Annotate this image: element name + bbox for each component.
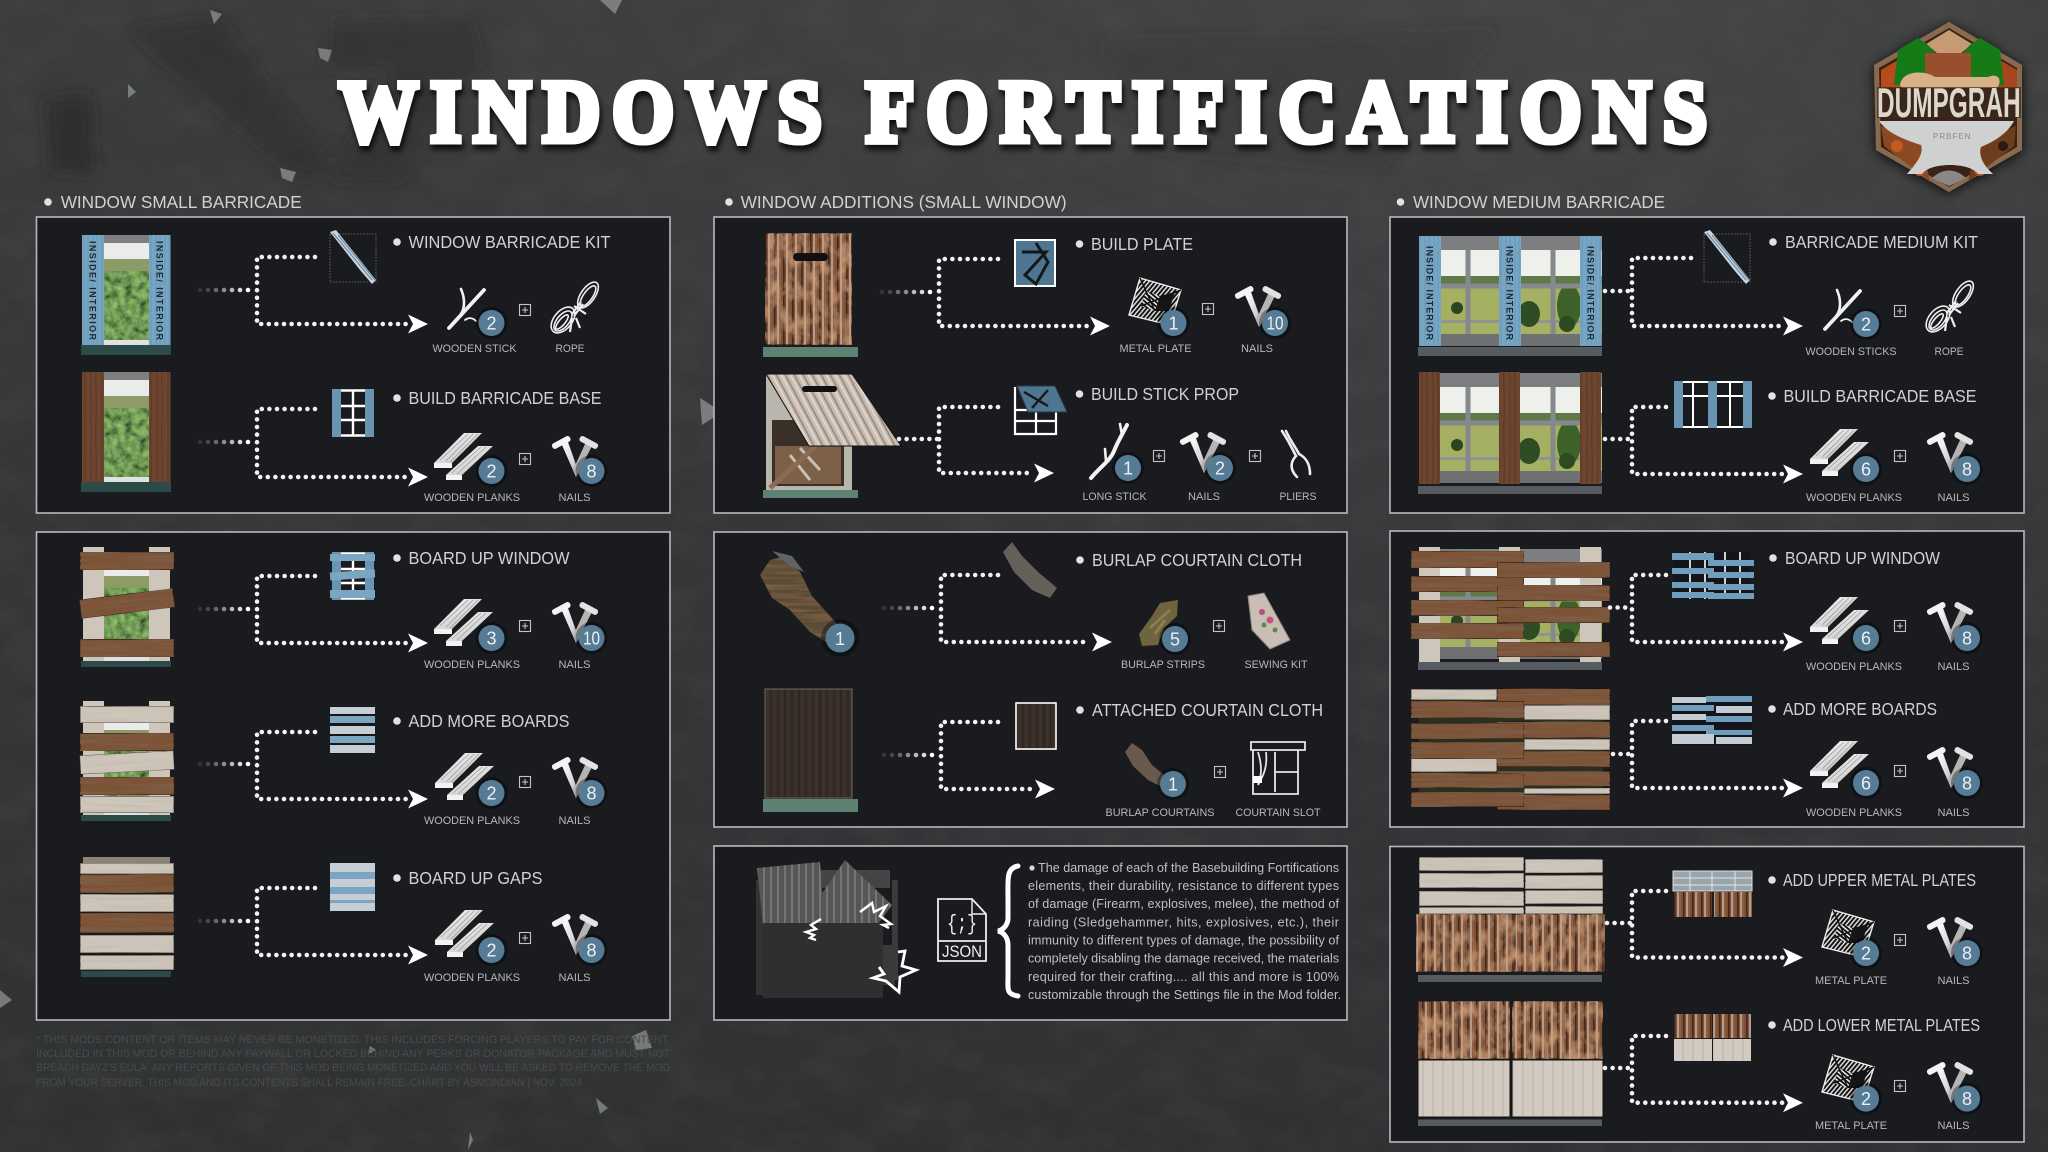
- ingredient: burlap strips: 5: [1170, 630, 1180, 650]
- icon: kit: [1704, 230, 1750, 284]
- heading: BUILD BARRICADE BASE: [408, 388, 602, 408]
- ingredient: nails: NAILS: [1938, 807, 1970, 819]
- ingredient: metal plate: 2: [1861, 944, 1871, 964]
- ingredient: wooden stick: WOODEN STICK: [432, 343, 517, 355]
- heading: ATTACHED COURTAIN CLOTH: [1092, 700, 1323, 720]
- ingredient: sewing kit: [1244, 593, 1308, 671]
- ingredient: planks: WOODEN PLANKS: [1806, 492, 1902, 504]
- icon: boards 1: [330, 552, 375, 600]
- panel: burlap curtains: [714, 532, 1347, 827]
- ingredient: nails: [551, 601, 608, 671]
- ingredient: planks: [1806, 429, 1902, 504]
- window: more boards: [80, 701, 174, 821]
- ingredient: planks: 3: [486, 628, 497, 648]
- ingredient: nails: NAILS: [1938, 1120, 1970, 1132]
- window: inside view: INSIDE/ INTERIOR: [88, 241, 98, 341]
- ingredient: metal plate: 1: [1168, 314, 1179, 334]
- ingredient: rope: ROPE: [1934, 346, 1964, 358]
- heading: BOARD UP WINDOW: [1785, 548, 1940, 568]
- panel: medium barricade boards: [1390, 531, 2024, 827]
- connector: [198, 732, 428, 808]
- plus: [1154, 450, 1164, 462]
- ingredient: planks: [424, 599, 520, 671]
- ingredient: rope: [546, 279, 602, 355]
- ingredient: metal plate: [1120, 278, 1192, 355]
- ingredient: planks: 2: [486, 784, 497, 804]
- icon: boards 2: [330, 706, 375, 754]
- ingredient: planks: 6: [1861, 774, 1871, 794]
- plus: [1894, 620, 1906, 632]
- icon: upper plates mini: [1673, 871, 1752, 917]
- plus: [1894, 934, 1906, 946]
- ingredient: nails: [1926, 431, 1983, 504]
- window: inside view: INSIDE/ INTERIOR: [1424, 246, 1434, 341]
- heading: BUILD PLATE: [1091, 234, 1193, 254]
- window: attached curtain: [763, 689, 858, 812]
- section heading: window small barricade: WINDOW SMALL BARRICADE: [61, 192, 302, 212]
- window: inside view: [81, 235, 171, 355]
- ingredient: planks: WOODEN PLANKS: [424, 972, 520, 984]
- plus: [520, 304, 530, 316]
- ingredient: planks: [1806, 741, 1902, 819]
- heading: BARRICADE MEDIUM KIT: [1785, 232, 1978, 252]
- connector: [198, 888, 428, 964]
- window: upper plates: [1416, 857, 1605, 982]
- window: stick prop: [763, 374, 901, 498]
- ingredient: metal plate: METAL PLATE: [1815, 975, 1887, 987]
- ingredient: nails: NAILS: [1938, 661, 1970, 673]
- ingredient: metal plate: [1815, 1055, 1887, 1132]
- ingredient: nails: NAILS: [558, 972, 590, 984]
- window: board up: [79, 547, 175, 667]
- ingredient: burlap curtains: BURLAP COURTAINS: [1106, 807, 1214, 819]
- plus: [520, 932, 530, 944]
- icon: burlap mini: [1003, 542, 1057, 598]
- connector: [1613, 721, 1803, 798]
- ingredient: planks: WOODEN PLANKS: [424, 815, 520, 827]
- ingredient: metal plate: METAL PLATE: [1815, 1120, 1887, 1132]
- heading: ADD LOWER METAL PLATES: [1783, 1015, 1980, 1035]
- text block: customizable through the Settings file in the Mod folder.: [1028, 988, 1341, 1002]
- connector: [198, 576, 428, 652]
- ingredient: planks: 2: [486, 462, 497, 482]
- ingredient: wooden sticks: 2: [1861, 314, 1871, 334]
- ingredient: nails: 8: [1962, 774, 1972, 794]
- icon: prop mini: [1015, 386, 1067, 434]
- ingredient: burlap strips: BURLAP STRIPS: [1121, 659, 1205, 671]
- icon: json file: [938, 899, 986, 961]
- connector: [198, 409, 428, 486]
- window: inside view: [1418, 236, 1602, 356]
- ingredient: nails: [1926, 916, 1983, 987]
- heading: BURLAP COURTAIN CLOTH: [1092, 550, 1302, 570]
- text block: required for their crafting.... all this and more is 100%: [1028, 970, 1339, 984]
- window: base: [1418, 372, 1602, 494]
- icon: curtain slot: COURTAIN SLOT: [1236, 807, 1321, 819]
- brace: [998, 866, 1018, 996]
- ingredient: metal plate: 2: [1861, 1089, 1871, 1109]
- item: burlap cloth: 1: [835, 629, 845, 649]
- illustration: damaged plates: [756, 860, 916, 998]
- plus: [520, 620, 530, 632]
- ingredient: long stick: LONG STICK: [1082, 491, 1147, 503]
- window: inside view: INSIDE/ INTERIOR: [1504, 246, 1514, 341]
- plus: [1202, 304, 1214, 314]
- ingredient: nails: NAILS: [1938, 975, 1970, 987]
- panel: small barricade boards: [36, 532, 670, 1020]
- window: gaps boarded: [80, 857, 174, 977]
- heading: WINDOW BARRICADE KIT: [408, 232, 611, 252]
- ingredient: long stick: [1082, 424, 1147, 503]
- heading: ADD MORE BOARDS: [1783, 699, 1937, 719]
- connector: [880, 259, 1110, 336]
- window: inside view: INSIDE/ INTERIOR: [1586, 246, 1596, 341]
- plus: [520, 454, 530, 464]
- text block: [1028, 861, 1341, 1002]
- plus: [1214, 620, 1224, 632]
- title: WINDOWS FORTIFICATIONS: [339, 63, 1707, 161]
- icon: json file: {;}: [947, 912, 977, 937]
- window: more boards: [1411, 688, 1610, 810]
- heading: ADD UPPER METAL PLATES: [1783, 870, 1976, 890]
- ingredient: planks: [424, 910, 520, 984]
- footer disclaimer: BREACH DAYZ'S EULA. ANY REPORTS GIVEN OF THIS MOD BEING MONETIZED AND YOU WILL BE ASKED TO REMOVE THE MOD: [36, 1062, 670, 1074]
- icon: boards 3: [330, 863, 375, 911]
- ingredient: nails: 8: [1962, 628, 1972, 648]
- ingredient: rope: ROPE: [556, 343, 584, 355]
- icon: curtain mini: [1016, 703, 1056, 749]
- footer disclaimer: FROM YOUR SERVER. THIS MOD AND ITS CONTENTS SHALL REMAIN FREE. CHART BY ASMONDIAN | NOV. 2024: [36, 1077, 582, 1089]
- ingredient: planks: 2: [486, 940, 497, 960]
- ingredient: metal plate: [1815, 910, 1887, 987]
- ingredient: nails: 8: [586, 462, 597, 482]
- ingredient: nails: NAILS: [558, 492, 590, 504]
- ingredient: sewing kit: SEWING KIT: [1244, 659, 1308, 671]
- ingredient: nails: NAILS: [558, 815, 590, 827]
- heading: BOARD UP WINDOW: [408, 548, 570, 568]
- ingredient: pliers: [1280, 431, 1316, 503]
- text block: completely disabling the damage received, the materials: [1028, 952, 1339, 966]
- ingredient: planks: [424, 753, 520, 827]
- plus: [1250, 450, 1260, 462]
- heading: BUILD STICK PROP: [1091, 384, 1239, 404]
- window: base: [81, 372, 171, 492]
- ingredient: nails: 8: [1962, 944, 1972, 964]
- text block: of damage (Firearm, explosives, melee), the method of: [1028, 897, 1340, 911]
- ingredient: planks: WOODEN PLANKS: [424, 659, 520, 671]
- text block: elements, their durability, resistance to different types: [1028, 879, 1339, 893]
- window: lower plates: [1418, 1001, 1603, 1126]
- icon: kit: [330, 230, 376, 284]
- ingredient: nails: [551, 756, 608, 827]
- plus: [1214, 766, 1226, 778]
- connector: [882, 722, 1055, 798]
- heading: ADD MORE BOARDS: [408, 711, 570, 731]
- ingredient: burlap strips: [1121, 600, 1205, 671]
- ingredient: nails: 10: [1266, 314, 1284, 334]
- ingredient: nails: NAILS: [558, 659, 590, 671]
- plus: [520, 776, 530, 788]
- ingredient: planks: WOODEN PLANKS: [1806, 807, 1902, 819]
- ingredient: metal plate: METAL PLATE: [1120, 343, 1192, 355]
- ingredient: planks: WOODEN PLANKS: [1806, 661, 1902, 673]
- ingredient: nails: 2: [1215, 458, 1225, 478]
- text block: immunity to different types of damage, the possibility of: [1028, 934, 1340, 948]
- connector: [1610, 575, 1803, 652]
- connector: [1605, 407, 1803, 484]
- icon: base frame: [332, 389, 374, 437]
- icon: lower plates mini: [1674, 1014, 1751, 1061]
- ingredient: planks: [424, 433, 520, 504]
- ingredient: nails: [551, 913, 608, 984]
- ingredient: nails: 8: [586, 940, 597, 960]
- connector: [1607, 891, 1803, 967]
- text block: raiding (Sledgehammer, hits, explosives, etc.), their: [1028, 916, 1339, 930]
- ingredient: nails: [1926, 746, 1983, 819]
- connector: [198, 257, 428, 334]
- ingredient: planks: WOODEN PLANKS: [424, 492, 520, 504]
- logo badge: PRBFEN: [1933, 132, 1971, 141]
- connector: [882, 575, 1112, 652]
- footer disclaimer: * THIS MODS CONTENT OR ITEMS MAY NEVER BE MONETIZED. THIS INCLUDES FORCING PLAYERS TO PAY FOR CONTENT,: [36, 1034, 670, 1046]
- ingredient: nails: [1179, 431, 1236, 503]
- plus: [1894, 306, 1906, 316]
- window: board up: [1411, 547, 1610, 670]
- ingredient: planks: 6: [1861, 460, 1871, 480]
- ingredient: wooden sticks: WOODEN STICKS: [1806, 346, 1896, 358]
- plus: [1894, 766, 1906, 776]
- panel: small barricade kit and base: [36, 217, 670, 513]
- icon: curtain slot: [1236, 742, 1321, 819]
- ingredient: wooden sticks: [1806, 290, 1896, 358]
- text block: The damage of each of the Basebuilding Fortifications: [1038, 861, 1339, 875]
- logo badge: [1874, 22, 2022, 192]
- ingredient: wooden stick: [432, 289, 517, 355]
- connector: [899, 407, 1054, 482]
- plus: [1894, 450, 1906, 462]
- ingredient: planks: 6: [1861, 628, 1871, 648]
- ingredient: burlap curtains: [1106, 743, 1214, 819]
- ingredient: rope: [1921, 278, 1977, 358]
- ingredient: nails: NAILS: [1241, 343, 1273, 355]
- ingredient: nails: [1926, 1061, 1983, 1132]
- ingredient: nails: [1926, 601, 1983, 673]
- heading: BUILD BARRICADE BASE: [1784, 386, 1976, 406]
- connector: [1605, 1036, 1803, 1112]
- icon: json file: JSON: [942, 942, 982, 961]
- ingredient: burlap curtains: 1: [1168, 774, 1178, 794]
- panel: json customization note: [714, 846, 1347, 1020]
- ingredient: nails: 8: [1962, 460, 1972, 480]
- plus: [1894, 1080, 1906, 1092]
- icon: boards 1: [1672, 552, 1754, 599]
- heading: BOARD UP GAPS: [408, 868, 542, 888]
- section heading: window medium barricade: WINDOW MEDIUM BARRICADE: [1413, 192, 1665, 212]
- panel: additions plate and prop: [714, 217, 1347, 513]
- item: burlap cloth: [760, 551, 859, 657]
- window: inside view: INSIDE/ INTERIOR: [154, 241, 164, 341]
- icon: boards 2: [1672, 696, 1752, 745]
- icon: wide base frame: [1674, 381, 1752, 428]
- connector: [1605, 258, 1803, 336]
- ingredient: wooden stick: 2: [486, 314, 497, 334]
- ingredient: nails: [1234, 285, 1291, 355]
- icon: plate mini: [1015, 240, 1055, 286]
- panel: medium barricade kit and base: [1390, 217, 2024, 513]
- window: metal plate: [763, 233, 858, 357]
- ingredient: nails: 8: [1962, 1089, 1972, 1109]
- footer disclaimer: [36, 1034, 670, 1089]
- ingredient: pliers: PLIERS: [1280, 491, 1316, 503]
- ingredient: nails: NAILS: [1188, 491, 1220, 503]
- footer disclaimer: INCLUDED IN THIS MOD OR BEHIND ANY PAYWALL OR LOCKED BEHIND ANY PERKS OR DONATOR PACKAGE AND MUST NOT: [36, 1048, 670, 1060]
- ingredient: nails: 8: [586, 784, 597, 804]
- ingredient: nails: [551, 435, 608, 504]
- ingredient: planks: [1806, 597, 1902, 673]
- section heading: window additions: WINDOW ADDITIONS (SMALL WINDOW): [741, 192, 1067, 212]
- panel: medium metal plates: [1390, 846, 2024, 1142]
- ingredient: nails: NAILS: [1938, 492, 1970, 504]
- ingredient: long stick: 1: [1123, 458, 1133, 478]
- ingredient: nails: 10: [583, 628, 600, 648]
